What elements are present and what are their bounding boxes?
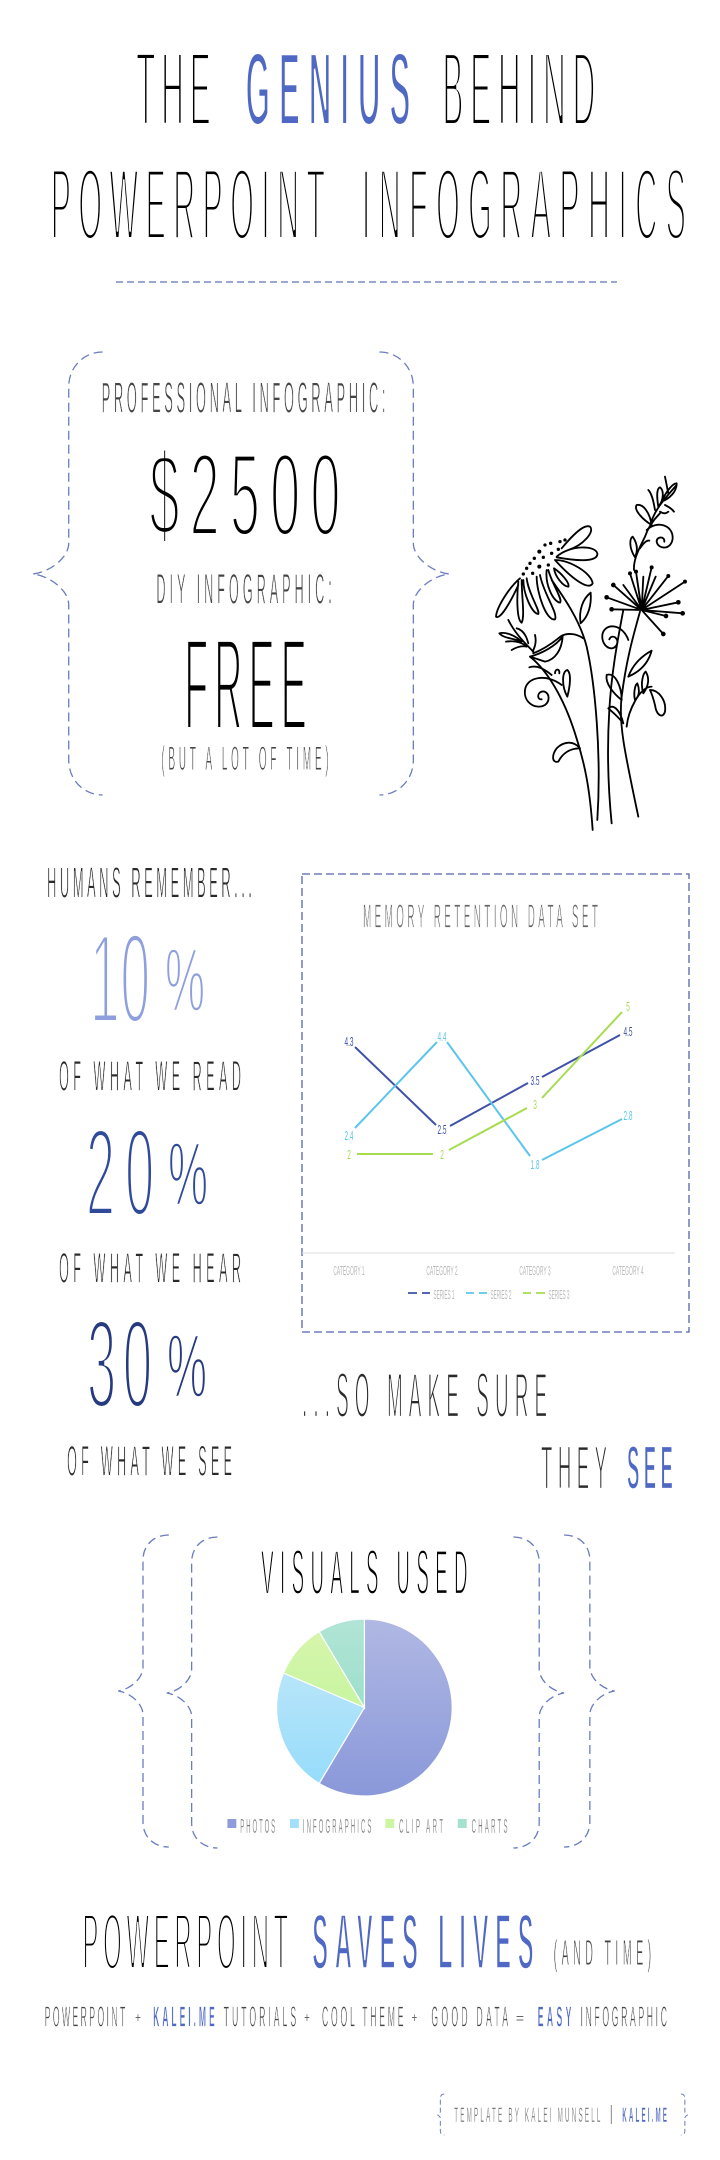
line chart: SERIES 3 xyxy=(548,1288,570,1303)
pie legend: INFOGRAPHICS xyxy=(303,1817,371,1838)
footer credit: KALEI.ME xyxy=(622,2104,667,2127)
inner left brace xyxy=(167,1537,217,1848)
line chart xyxy=(302,1001,675,1303)
formula text: INFOGRAPHIC xyxy=(580,2001,667,2033)
panel: memory retention chart xyxy=(302,874,689,1332)
line chart: CATEGORY 1 xyxy=(333,1264,365,1279)
stat: 30 percent xyxy=(87,1295,207,1435)
read label: OF WHAT WE READ xyxy=(59,1053,241,1100)
outer left brace xyxy=(118,1535,169,1847)
chart title: MEMORY RETENTION DATA SET xyxy=(363,899,598,936)
title: POWERPOINT xyxy=(51,147,325,261)
line chart: 2.8 xyxy=(623,1110,633,1124)
title: INFOGRAPHICS xyxy=(362,147,686,261)
callout: so make sure they see: ...SO MAKE SURE xyxy=(302,1360,547,1431)
formula text: + xyxy=(412,2009,417,2025)
professional label: PROFESSIONAL INFOGRAPHIC: xyxy=(102,373,385,422)
heading: powerpoint saves lives: POWERPOINT xyxy=(83,1897,288,1987)
pie legend: CLIP ART xyxy=(399,1817,443,1838)
heading: HUMANS REMEMBER... xyxy=(47,858,252,907)
line chart: 4.4 xyxy=(437,1031,447,1045)
inner right brace xyxy=(513,1537,564,1848)
line chart: 4.3 xyxy=(344,1036,354,1050)
stat: 30 percent: 30 xyxy=(87,1295,152,1435)
pie legend: CHARTS xyxy=(472,1817,507,1838)
line chart: CATEGORY 4 xyxy=(612,1264,644,1279)
stat: 20 percent xyxy=(86,1105,208,1243)
formula text: KALEI.ME xyxy=(153,2001,215,2033)
formula text: POWERPOINT xyxy=(45,2001,125,2033)
formula text xyxy=(45,2001,667,2033)
title xyxy=(51,29,686,261)
heading: powerpoint saves lives: SAVES LIVES xyxy=(312,1897,534,1987)
heading: powerpoint saves lives: (AND TIME) xyxy=(554,1932,651,1973)
formula text: EASY xyxy=(538,2001,571,2033)
footer credit: TEMPLATE BY KALEI MUNSELL xyxy=(454,2104,601,2127)
panel: cost comparison xyxy=(33,352,449,795)
time note: (BUT A LOT OF TIME) xyxy=(161,740,329,778)
callout: so make sure they see xyxy=(302,1360,673,1503)
line chart: CATEGORY 2 xyxy=(426,1264,458,1279)
formula text: GOOD DATA xyxy=(431,2001,508,2033)
callout: so make sure they see: THEY xyxy=(541,1433,607,1503)
footer credit xyxy=(437,2094,688,2135)
heading: VISUALS USED xyxy=(261,1537,468,1608)
outer right brace xyxy=(564,1535,615,1847)
formula text: = xyxy=(516,2010,524,2026)
hear label: OF WHAT WE HEAR xyxy=(59,1245,241,1292)
diy label: DIY INFOGRAPHIC: xyxy=(156,566,332,613)
heading: powerpoint saves lives xyxy=(83,1897,651,1987)
formula text: + xyxy=(304,2009,310,2025)
panel: visuals used xyxy=(118,1535,615,1848)
line chart: CATEGORY 3 xyxy=(519,1264,551,1279)
line chart: 5 xyxy=(626,1001,630,1015)
line chart: 4.5 xyxy=(623,1026,633,1040)
free: FREE xyxy=(184,612,307,758)
stat: 10 percent xyxy=(90,908,205,1050)
price: $2500 xyxy=(149,430,340,561)
panel: humans remember xyxy=(47,858,252,1485)
line chart: 2 xyxy=(347,1149,351,1163)
formula text: + xyxy=(135,2009,141,2025)
title: BEHIND xyxy=(442,29,595,149)
title: THE xyxy=(136,29,211,149)
line chart: 2 xyxy=(440,1149,444,1163)
line chart: 2.4 xyxy=(344,1130,354,1144)
stat: 10 percent: % xyxy=(165,931,205,1031)
line chart: SERIES 2 xyxy=(490,1288,512,1303)
line chart: 3 xyxy=(533,1099,537,1113)
right brace xyxy=(379,352,449,795)
pie chart xyxy=(277,1619,452,1796)
line chart: 3.5 xyxy=(530,1075,540,1089)
formula text: COOL THEME xyxy=(322,2001,403,2033)
title: GENIUS xyxy=(246,29,410,149)
pie legend: PHOTOS xyxy=(240,1817,275,1838)
callout: so make sure they see: SEE xyxy=(627,1433,673,1503)
stat: 20 percent: % xyxy=(168,1125,208,1225)
icon: flowers xyxy=(496,477,687,830)
pie legend xyxy=(227,1817,507,1838)
formula text: TUTORIALS xyxy=(224,2001,296,2033)
line chart: 2.5 xyxy=(437,1124,447,1138)
line chart: 1.8 xyxy=(530,1159,540,1173)
stat: 30 percent: % xyxy=(167,1317,207,1417)
line chart: SERIES 1 xyxy=(433,1288,455,1303)
left brace xyxy=(33,352,103,795)
stat: 10 percent: 10 xyxy=(90,908,150,1050)
stat: 20 percent: 20 xyxy=(86,1105,154,1243)
see label: OF WHAT WE SEE xyxy=(67,1438,232,1485)
